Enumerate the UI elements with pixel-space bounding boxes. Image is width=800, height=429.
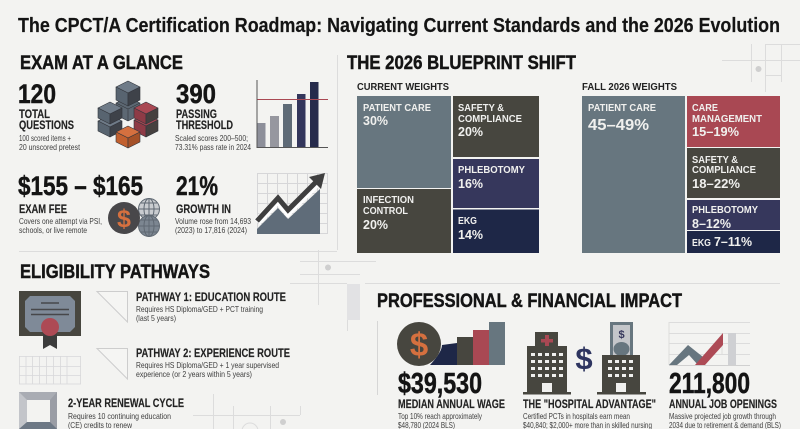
tile: safety and compliance [687,148,780,198]
pathway 1 [97,290,286,323]
stat: median wage: $39,530 [398,368,482,400]
renewal cycle text: Requires 10 continuing education [68,411,171,421]
icon: wage coin and bars [397,322,505,366]
icon: growth arrow chart [257,173,328,234]
tile: safety and compliance: 20% [458,124,483,139]
tile: patient care: 45–49% [588,117,649,134]
icon: hospitals and dollar [523,322,646,394]
tile: ekg [453,210,539,253]
stat: exam fee: Covers one attempt via PSI, [19,216,102,226]
stat: growth [175,171,251,235]
panel: professional and financial impact [377,291,781,429]
tile: patient care: 30% [363,113,388,128]
tile: care management: MANAGEMENT [692,113,763,125]
treemap: fall 2026 weights [582,81,780,253]
grid decoration under certificate [19,356,81,384]
stat: total questions: 20 unscored pretest [19,142,81,152]
icon: hospitals and dollar: $ [618,329,625,341]
tile: safety and compliance: SAFETY & [692,154,738,166]
tile: phlebotomy: PHLEBOTOMY [692,204,758,216]
stat: passing threshold: 73.31% pass rate in 2024 [175,142,251,152]
pathway 2: Requires HS Diploma/GED + 1 year supervised [136,360,279,370]
tile: phlebotomy: PHLEBOTOMY [458,164,525,176]
icon: certificate [19,291,81,349]
icon: hospitals and dollar: $ [575,341,593,376]
tile: infection control: CONTROL [363,205,408,217]
stat: median wage: Top 10% reach approximately [398,411,483,421]
stat: exam fee: $155 – $165 [18,171,143,201]
stat: passing threshold: Scaled scores 200–500; [175,133,248,143]
stat: exam fee: EXAM FEE [19,202,67,216]
stat: total questions: QUESTIONS [19,118,74,132]
panel: 2026 blueprint shift [347,53,780,253]
panel: exam at a glance [18,53,328,236]
icon: coin and globes [108,198,160,236]
tile: safety and compliance [453,96,539,157]
renewal cycle text [68,396,184,429]
stat: total questions: 100 scored items + [19,133,71,143]
stat: job openings [669,368,781,429]
tile: care management: CARE [692,102,718,114]
tile: care management: 15–19% [692,124,739,139]
tile: phlebotomy [453,159,539,208]
heading: exam at a glance: EXAM AT A GLANCE [20,53,183,74]
renewal cycle text: 2-YEAR RENEWAL CYCLE [68,396,184,410]
pathway 1: PATHWAY 1: EDUCATION ROUTE [136,290,286,304]
tile: ekg: EKG [458,215,477,227]
icon: stacked cubes [98,81,158,148]
pathway 2: experience (or 2 years within 5 years) [136,369,252,379]
stat: hospital advantage [523,397,656,429]
tile: ekg [687,231,780,253]
stat: growth: Volume rose from 14,693 [175,216,251,226]
stat: hospital advantage: THE "HOSPITAL ADVANTAGE" [523,397,656,411]
tile: infection control: INFECTION [363,194,414,206]
stat: exam fee [18,171,143,235]
tile: patient care: PATIENT CARE [588,102,656,114]
heading: professional and financial impact: PROFESSIONAL & FINANCIAL IMPACT [377,291,682,312]
stat: total questions: TOTAL [19,107,50,121]
treemap: fall 2026 weights: FALL 2026 WEIGHTS [582,81,677,93]
tile: phlebotomy [687,200,780,231]
treemap: current weights: CURRENT WEIGHTS [357,81,449,93]
stat: passing threshold: 390 [176,79,216,109]
tile: phlebotomy: 16% [458,176,483,191]
icon: coin and globes: $ [117,205,131,233]
stat: median wage [398,368,505,429]
stat: total questions [18,79,81,152]
panel: eligibility pathways [19,262,290,429]
heading: blueprint shift: THE 2026 BLUEPRINT SHIFT [347,53,576,74]
icon: wage coin and bars: $ [410,326,428,363]
bar chart: pass rate [257,80,328,148]
tile: ekg: 7–11% [714,234,752,249]
tile: ekg: EKG [692,237,711,249]
stat: passing threshold: THRESHOLD [176,118,233,132]
tile: safety and compliance: COMPLIANCE [458,113,522,125]
tile: patient care [357,96,451,188]
stat: job openings: 211,800 [669,368,750,400]
heading: eligibility pathways: ELIGIBILITY PATHWAYS [20,262,210,283]
pathway 1: Requires HS Diploma/GED + PCT training [136,304,263,314]
icon: renewal frame [19,392,57,429]
tile: patient care: PATIENT CARE [363,102,431,114]
pathway 2: PATHWAY 2: EXPERIENCE ROUTE [136,346,290,360]
tile: safety and compliance: COMPLIANCE [692,164,756,176]
stat: growth: GROWTH IN [176,202,231,216]
pathway 2 [97,346,290,379]
tile: infection control [357,189,451,253]
tile: safety and compliance: 18–22% [692,176,740,191]
tile: phlebotomy: 8–12% [692,216,731,231]
stat: total questions: 120 [18,79,56,109]
pathway 1: (last 5 years) [136,313,176,323]
stat: growth: 21% [176,171,218,201]
tile: ekg: 14% [458,227,483,242]
treemap: current weights [357,81,539,253]
stat: hospital advantage: Certified PCTs in hospitals earn mean [523,411,630,421]
tile: infection control: 20% [363,217,388,232]
stat: passing threshold [175,79,251,152]
stat: exam fee: schools, or live remote [19,225,87,235]
tile: care management [687,96,780,147]
tile: patient care [582,96,685,253]
stat: passing threshold: PASSING [176,107,217,121]
tile: safety and compliance: SAFETY & [458,102,504,114]
stat: growth: (2023) to 17,816 (2024) [175,225,247,235]
stat: median wage: MEDIAN ANNUAL WAGE [398,397,505,411]
icon: job growth chart [669,322,750,366]
